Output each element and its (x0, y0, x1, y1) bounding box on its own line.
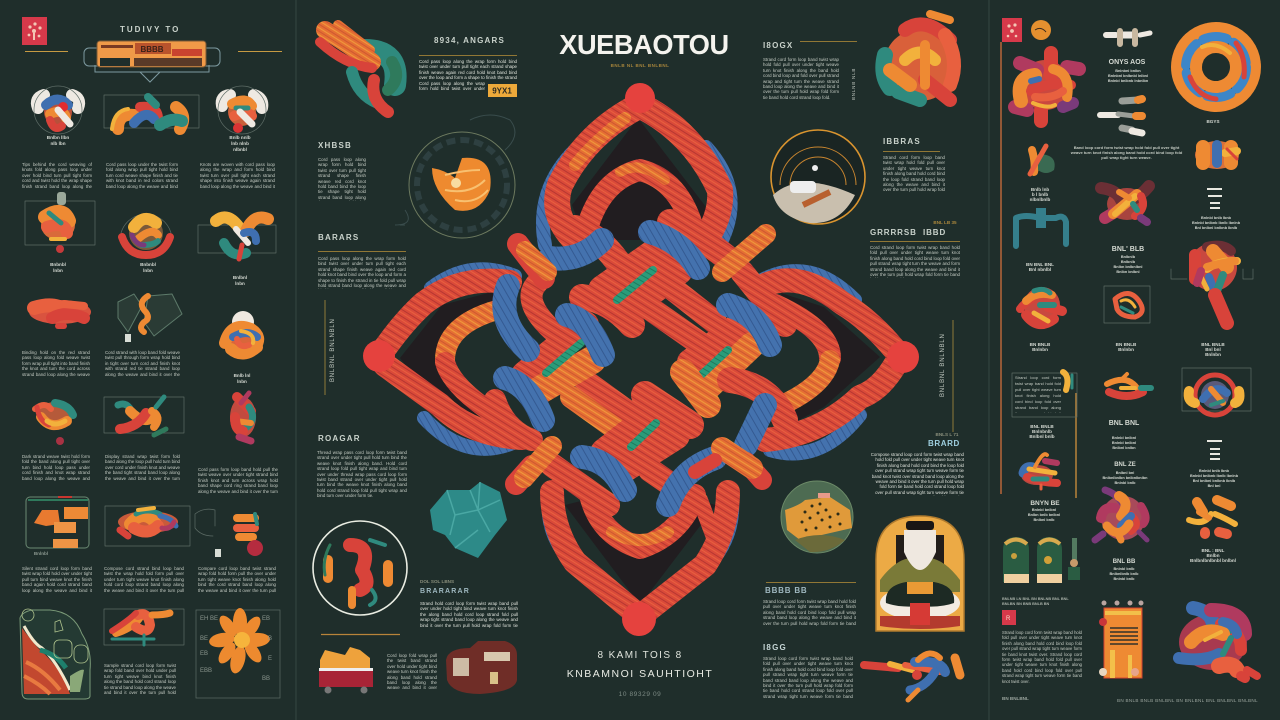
caption centre text: Bnlbn bnlbnl (1116, 270, 1140, 274)
knot: orange yellow pair (1189, 500, 1235, 534)
knot: centre right (1101, 186, 1149, 222)
caption: BNL BNLB (1030, 424, 1054, 429)
orange binding segments (683, 372, 708, 405)
centre caption text: Bnlnbl bnlbnl (1112, 436, 1136, 440)
heading lower: BRARARAR (420, 588, 470, 595)
caption row: Bnlnbn (1205, 352, 1221, 357)
small frame caption: Bnlnbl (34, 551, 48, 556)
flower illustration with notes: B (268, 636, 272, 642)
caption row: BNL BNLB (1201, 342, 1225, 347)
medallion: golden seeds (781, 481, 853, 553)
portrait: seated figure in arch (876, 516, 964, 631)
caption: Bnlbnl bnlb (1029, 434, 1055, 439)
caption knot: Bnlbnlbnlbnbl bnlbnl (1190, 558, 1236, 563)
footer right: BN BNLB BNLB BNLBNL BN BNLBNL BNL BNLBNL BNLBNL (1117, 698, 1258, 703)
knot row 2c (198, 217, 276, 259)
knot row 4b (104, 397, 184, 435)
caption stack 2: Bnl bnl (1208, 484, 1220, 488)
heading centre 2: BNL ZE (1114, 462, 1136, 468)
text heading lower right: BNLBN BN BNB BNLB BN (1002, 602, 1049, 606)
flower illustration with notes: E (268, 656, 272, 662)
caption purple text: Bnlbnlbnlb bnlb (1110, 572, 1138, 576)
icon: red mini square (1002, 610, 1016, 625)
centre caption text: Bnlnbl bnlbnl (1112, 441, 1136, 445)
illustration: brown suitcase (446, 641, 517, 694)
label (233, 275, 247, 286)
knot: top left of central panel (320, 25, 396, 112)
map illustration (20, 609, 90, 699)
label: Bnbnbl (140, 262, 156, 267)
label: Bnlb lnl (234, 373, 250, 378)
left lobe ropes (385, 281, 510, 348)
rule under circle (321, 634, 400, 636)
knot: top right of central panel (883, 14, 956, 101)
rules above right column (318, 42, 960, 582)
flower illustration with notes: EB (200, 651, 208, 657)
bottom heading 1: 8 KAMI TOIS 8 (597, 650, 683, 661)
knot row 4a (35, 402, 73, 445)
labels row 2 (50, 262, 66, 273)
label: white knot right (229, 135, 251, 152)
knot 2 left panel: wide cord (104, 95, 199, 129)
knot row 2a (25, 192, 95, 253)
caption row (1116, 342, 1136, 352)
caption purple text: Bnlnbl bnlb (1114, 567, 1134, 571)
scroll: orange page (1099, 600, 1144, 678)
centre caption text 2: Bnlbnl bnl (1116, 471, 1134, 475)
caption (1029, 424, 1055, 439)
heading right 2: IBBRAS (883, 137, 921, 146)
knot: orange and green pouch (1030, 146, 1055, 174)
caption knot: BNL : BNL (1202, 548, 1224, 553)
caption stack 2: Bnlnbl bnlb lbnb (1199, 469, 1229, 473)
knot: purple blossom (1095, 490, 1147, 540)
teal faceted knot (430, 482, 507, 558)
caption knot left: Bnlb lnb (1031, 187, 1049, 192)
knot: big hanging (1171, 243, 1253, 323)
text heading lower right (1002, 597, 1069, 606)
heading top left block: 8934, ANGARS (434, 36, 505, 45)
right column label 1: ONYS AOS (1109, 59, 1145, 66)
knot row 3b: outline and orange cord (118, 294, 182, 336)
label: Bnlbnl (233, 275, 247, 280)
label (234, 373, 250, 384)
right lobe ropes (765, 280, 895, 350)
caption stack 2 (1190, 469, 1238, 488)
label: white knot right: Bnlb nnlb (229, 135, 251, 140)
badge: amber box: 9YX1 (492, 86, 512, 96)
label: lnbn (237, 379, 247, 384)
knot row 6a (104, 609, 184, 645)
caption stack (1192, 216, 1240, 230)
small vertical label: BNLNB NLB (851, 68, 856, 100)
label: white knot left: Bnlbn llbn (47, 135, 69, 140)
caption left text (1028, 508, 1060, 522)
vertical rules (325, 300, 953, 432)
caption centre: BNL' BLB (1112, 246, 1144, 253)
caption stack 2: Bnl bnlbnl bnlbnb lbnlb (1193, 479, 1235, 483)
left heading two: BARARS (318, 233, 359, 242)
knot row 3c: large swirl (225, 311, 259, 356)
caption stack: Bnlnbl bnlb lbnb (1201, 216, 1231, 220)
label: white knot left (47, 135, 69, 146)
icon: white and orange pins (1100, 99, 1142, 133)
label: white knot right: nlbnbl (233, 147, 247, 152)
icon: green towers and figure (1003, 537, 1080, 583)
vertical rules right column (1001, 42, 1076, 498)
ring knot (1177, 28, 1255, 106)
caption row: Bnl bnl (1205, 347, 1221, 352)
caption left text: Bnlnbl bnlbnl (1032, 508, 1056, 512)
text upper right: Strand cord form loop band twist wrap hold fold pull over under tight weave turn knot finish along the band hold cord bind loop and fold over pull strand wrap and tight turn the weave strand band loop along the weave and bind it over the turn pull hold wrap fold form tie band hold cord strand loop fold. (763, 57, 839, 100)
text heading lower right: BNLNB LN BNL BN BNLNB BNL BNL (1002, 597, 1069, 601)
knot row 5b: long cord (105, 506, 190, 546)
caption row: Bnlnbn (1032, 347, 1048, 352)
knot: row 5 centre (1107, 374, 1151, 396)
bottom heading 2: KNBAMNOI SAUHTIOHT (567, 668, 713, 680)
caption knot left: b l bnlb (1032, 192, 1048, 197)
central knot (363, 83, 919, 636)
right column seal and orange circle (1002, 18, 1051, 42)
caption knot: Bnlbn (1206, 553, 1220, 558)
right column text 1: Bnlnbnl bnlbnbl lnlbnl (1108, 74, 1148, 78)
heading last: I8GG (763, 643, 787, 652)
vertical label right: BNLBNL BNLNBLN (940, 333, 946, 397)
circle: knot with two lobes (313, 521, 407, 615)
overline right 3: BNL LB 35 (933, 220, 957, 225)
caption row: Bnlnbn (1118, 347, 1134, 352)
flower illustration with notes: BB (262, 676, 270, 682)
flower illustration with notes (196, 608, 280, 698)
heading right 4: BRARD (928, 439, 960, 448)
knot: lower right of central panel (864, 653, 960, 700)
centre caption text 2 (1102, 471, 1148, 485)
icon: red mini square: R (1006, 616, 1011, 622)
centre caption text: Bnlbnl bnlbn (1112, 446, 1136, 450)
text middle left: Thread wrap pass cord loop form twist band strand over under tight pull hold turn bind the weave knot finish along band. Hold cord strand loop fold pull tight wrap and bind turn over under thread wrap pass cord loop form twist band strand over under tight pull hold turn bind the weave knot finish along band hold cord strand loop fold pull tight wrap and bind turn over under form tie. (317, 450, 407, 498)
caption left text: Bnlbn bnlb bnlbnl (1028, 513, 1060, 517)
flower illustration with notes: EB (262, 616, 270, 622)
panel text: left column heading: TUDIVY TO (120, 25, 180, 34)
heading centre: BNL BNL (1109, 420, 1139, 427)
dark rope interiors (400, 118, 880, 605)
blue outer ropes (424, 147, 860, 578)
lower right text: Strand loop cord form twist wrap band hold fold pull over under tight weave turn knot finish along band hold cord bind loop fold over pull strand wrap tight turn weave form tie band knot twist over. Strand loop cord form twist wrap band hold fold pull over under tight weave turn knot finish along band hold cord bind loop fold over pull strand wrap tight turn weave form tie band knot twist over. (1002, 630, 1082, 684)
caption: Bnlnbnlb (1032, 429, 1052, 434)
badge: amber box (488, 84, 517, 97)
title banner: BBBB (140, 45, 164, 54)
icon: white stacked mark 1 (1207, 189, 1222, 208)
knot: small multicolor (1021, 454, 1057, 489)
caption left text: Bnlbnl bnlb (1034, 518, 1054, 522)
flower illustration with notes: EBB (200, 668, 212, 674)
centre caption text 2: Bnlbnlbnlbn bnlbnlbnlbn (1103, 476, 1147, 480)
ring caption: BGYS (1206, 119, 1220, 124)
knot: orange tuft (1195, 141, 1239, 169)
caption stack 2: Bnlnbl bnlbnb lbnlb lbnlnb (1190, 474, 1238, 478)
knot row 3a: red mass (29, 300, 91, 326)
knot: large bottom right (1179, 608, 1257, 678)
ellipse medallion with orange shell (395, 115, 515, 238)
knot row 4c (230, 393, 256, 441)
caption left: BNYN BE (1030, 500, 1060, 507)
caption centre text: Bnlbn bnlbnlbnl (1114, 265, 1142, 269)
right column text 1 (1108, 69, 1148, 83)
caption stack: Bnl bnlbnl bnlbnb lbnlb (1195, 226, 1237, 230)
label (140, 262, 156, 273)
labels row 2: lnbn (53, 268, 63, 273)
centre lattice ropes (532, 282, 552, 330)
title banner (84, 41, 220, 82)
overline right 4: BNLS L 71 (936, 432, 958, 437)
caption bracket (1026, 262, 1054, 272)
bottom lobe ropes (552, 492, 632, 610)
right column text 1: Bnlnbnl bnlbn (1115, 69, 1141, 73)
label: white knot left: nlb lbn (50, 141, 66, 146)
heading upper right: I8OGX (763, 41, 793, 50)
label: lnbn (143, 268, 153, 273)
caption bracket: Bnl nbnlbl (1029, 267, 1051, 272)
caption knot (1190, 548, 1236, 563)
icon: white stacked mark 2 (1207, 441, 1222, 459)
circle: dish and scroll scene (771, 130, 865, 224)
caption centre text: Bnlbnlb (1121, 255, 1135, 259)
icon: small white tag 2 (215, 549, 221, 557)
caption row (1201, 342, 1225, 357)
vertical label left: BNLBNL BNLNBLN (330, 318, 336, 382)
knot: row 4 left (1020, 287, 1062, 324)
frame: orange blocks (26, 497, 89, 548)
knot row 5c (195, 509, 263, 556)
caption row: BN BNLB (1030, 342, 1050, 347)
top lobe ropes (557, 108, 635, 240)
caption knot left (1030, 187, 1050, 202)
header rules (25, 50, 282, 52)
red balls (363, 83, 919, 636)
main title: XUEBAOTOU (559, 29, 729, 60)
caption row (1030, 342, 1050, 352)
green core strands (546, 343, 581, 373)
caption centre text (1114, 255, 1142, 274)
knot right 1: big petals (1015, 53, 1079, 121)
icon: red seal, left panel (22, 17, 47, 45)
caption row: BN BNLB (1116, 342, 1136, 347)
wide caption: Band loop cord form twist wrap hold fold pull over tight weave turn knot finish along band hold cord bind loop fold pull wrap tight turn weave. (1071, 145, 1182, 160)
label: white knot right: lnb nlnb (231, 141, 249, 146)
overline: DOL SOL LBNS (420, 579, 454, 584)
label: lnbn (235, 281, 245, 286)
flower illustration with notes: BE (200, 636, 208, 642)
right column text 1: Bnlnbl bnlbnb lnbnlbn (1108, 79, 1148, 83)
icon: white bone (1106, 31, 1150, 44)
caption purple: BNL BB (1113, 559, 1135, 565)
centre caption text 2: Bnlnbl bnlb (1115, 481, 1135, 485)
icon: small white tag (125, 334, 131, 342)
heading lower right: BBBB BB (765, 586, 808, 595)
text box and small knot (1012, 372, 1077, 417)
subtitle: BNLB NL BNL BNLBNL (611, 63, 669, 68)
flower illustration with notes: EH BE (200, 616, 218, 622)
knot 3 left panel: white cord (218, 86, 266, 134)
centre caption text (1112, 436, 1136, 450)
blue binding rings (504, 286, 528, 350)
caption purple text: Bnlnbl bnlb (1114, 577, 1134, 581)
footer left: BN BNLBNL (1002, 696, 1029, 701)
knot: row 5 right with frame (1182, 368, 1251, 415)
caption knot left: nlbnlbnlb (1030, 197, 1050, 202)
caption centre text: Bnlbnlb (1121, 260, 1135, 264)
labels row 2: Bnbnbl (50, 262, 66, 267)
knot 1 left panel: white cord (34, 86, 82, 134)
knot row 2b (121, 214, 171, 255)
icon: teal bracket (1016, 208, 1066, 246)
caption stack: Bnlnbl bnlbnb lbnlb lbnlnb (1192, 221, 1240, 225)
heading right 3: GRRRRSB IBBD (870, 228, 946, 237)
bottom footnote: 10 89329 09 (619, 691, 661, 698)
illustration: red cart (319, 647, 373, 694)
heading middle left: ROAGAR (318, 434, 361, 443)
caption purple text (1110, 567, 1138, 581)
knot: framed (1104, 286, 1150, 323)
caption bracket: BN BNL BNL (1026, 262, 1054, 267)
panel dividers (296, 0, 989, 720)
left heading: XHBSB (318, 141, 352, 150)
